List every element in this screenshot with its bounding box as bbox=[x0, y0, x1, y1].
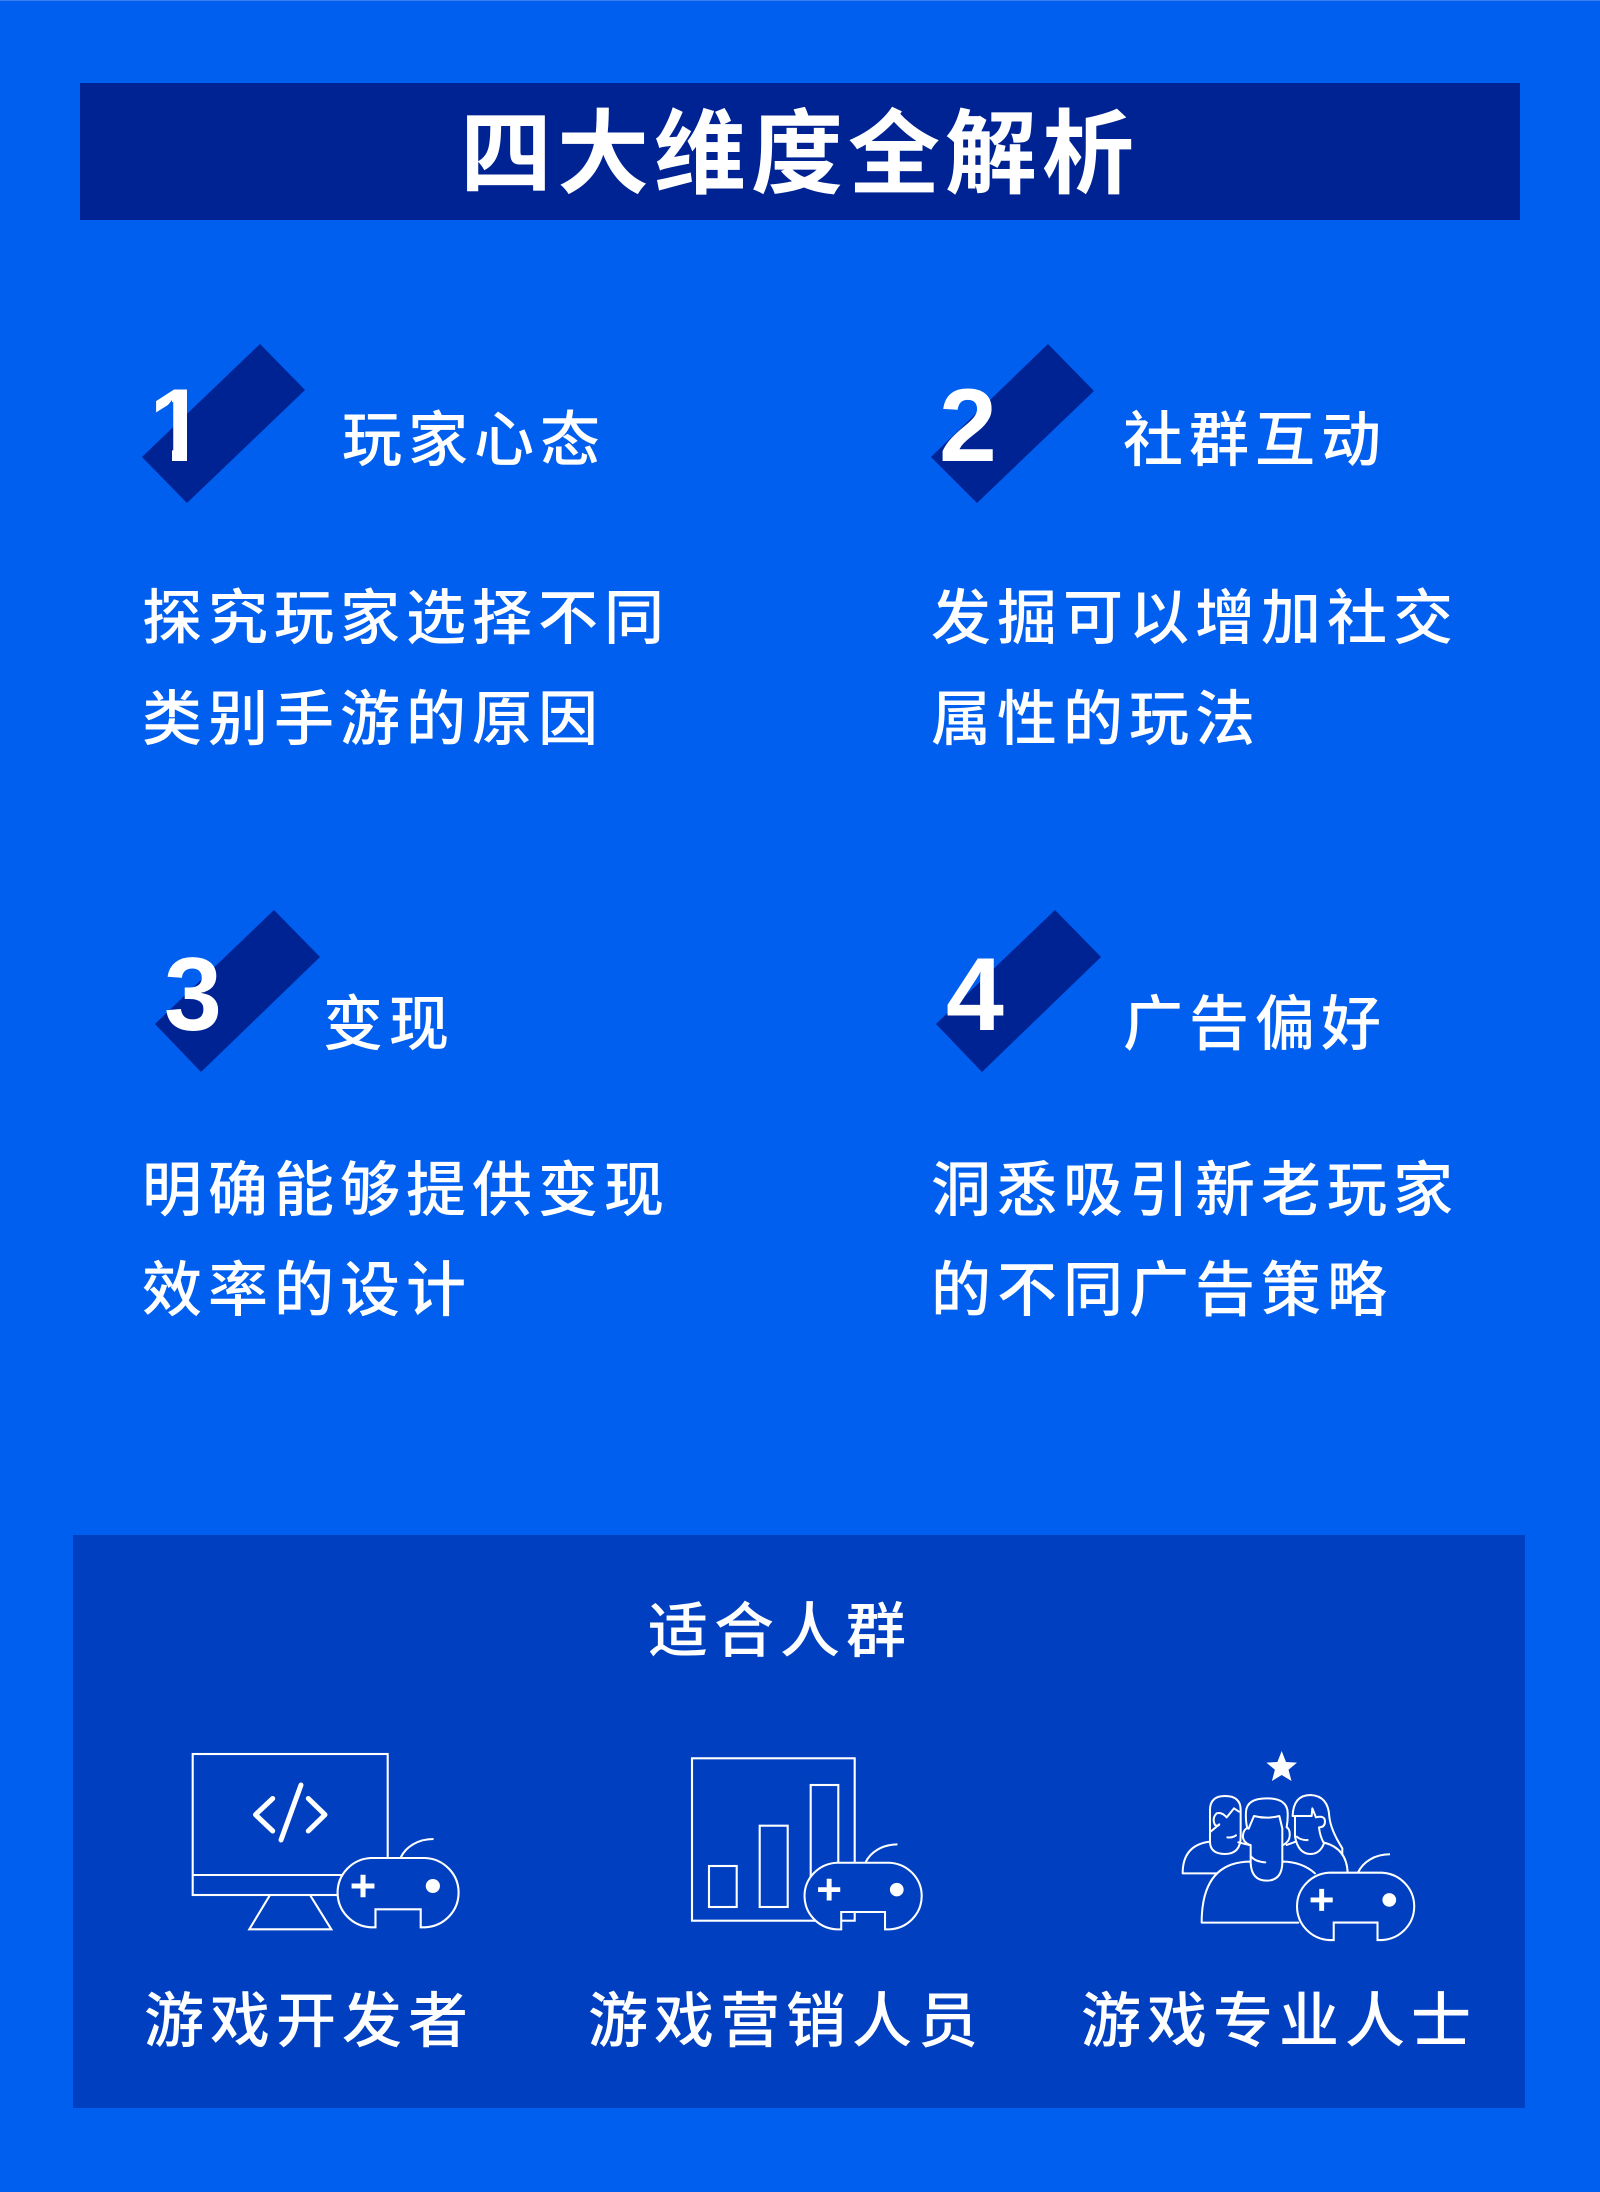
body text 3 bbox=[142, 1157, 670, 1324]
body text 4 bbox=[931, 1157, 1459, 1324]
panel: target audience bbox=[73, 1535, 1525, 2108]
body text 1: 类别手游的原因 bbox=[142, 686, 604, 753]
body text 2: 属性的玩法 bbox=[931, 686, 1261, 753]
body text 4: 的不同广告策略 bbox=[931, 1257, 1393, 1324]
panel: dimension 1 bbox=[142, 344, 670, 753]
icon: bar chart with controller bbox=[692, 1758, 922, 1929]
label: 游戏专业人士: 游戏专业人士 bbox=[1081, 1988, 1477, 2055]
heading: 适合人群: 适合人群 bbox=[648, 1598, 912, 1665]
number badge 4: 4 bbox=[946, 937, 1004, 1053]
number badge 1 bbox=[142, 344, 305, 503]
body text 2 bbox=[931, 585, 1459, 753]
body text 1 bbox=[142, 585, 670, 753]
panel: dimension 3 bbox=[142, 910, 670, 1324]
heading: 变现: 变现 bbox=[323, 991, 455, 1058]
number badge 2 bbox=[931, 344, 1094, 503]
label: 游戏开发者: 游戏开发者 bbox=[144, 1988, 474, 2055]
title: 四大维度全解析 bbox=[460, 104, 1139, 206]
heading: 玩家心态: 玩家心态 bbox=[342, 407, 606, 474]
number badge 2: 2 bbox=[939, 368, 997, 484]
number badge 3: 3 bbox=[164, 937, 222, 1053]
body text 3: 效率的设计 bbox=[142, 1257, 472, 1324]
panel: dimension 2 bbox=[931, 344, 1459, 753]
number badge 3 bbox=[155, 910, 320, 1072]
panel: dimension 4 bbox=[931, 910, 1459, 1324]
icon: monitor with code and controller bbox=[193, 1754, 459, 1929]
title banner bbox=[80, 83, 1520, 220]
label: 游戏营销人员: 游戏营销人员 bbox=[588, 1988, 984, 2055]
body text 1: 探究玩家选择不同 bbox=[142, 585, 670, 652]
icon: people with star and controller bbox=[1183, 1751, 1414, 1940]
heading: 社群互动: 社群互动 bbox=[1123, 407, 1387, 474]
body text 2: 发掘可以增加社交 bbox=[931, 585, 1459, 652]
body text 4: 洞悉吸引新老玩家 bbox=[931, 1157, 1459, 1224]
body text 3: 明确能够提供变现 bbox=[142, 1157, 670, 1224]
heading: 广告偏好: 广告偏好 bbox=[1123, 991, 1387, 1058]
number badge 4 bbox=[936, 910, 1101, 1072]
number badge 1: 1 bbox=[149, 368, 207, 484]
